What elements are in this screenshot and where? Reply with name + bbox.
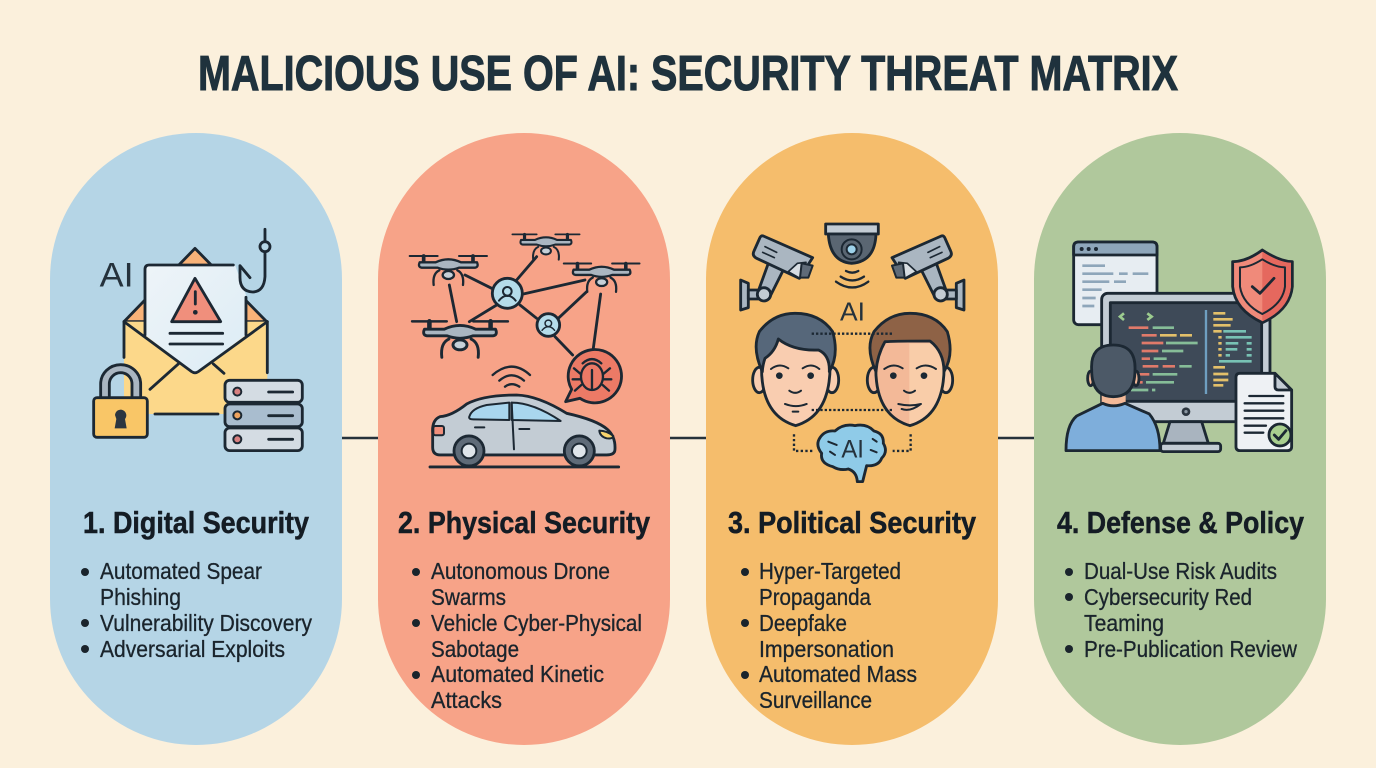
list: digital security threats: Vulnerability Discovery — [100, 610, 312, 636]
list: physical security threats: Automated Kinetic — [431, 661, 604, 687]
list: physical security threats — [412, 558, 642, 713]
list: defense and policy measures: Teaming — [1084, 610, 1164, 636]
list: digital security threats — [81, 558, 312, 662]
list: physical security threats: Sabotage — [431, 636, 519, 662]
list: digital security threats: Automated Spear — [100, 558, 262, 584]
list: political security threats — [741, 558, 917, 713]
panel: political security — [706, 133, 998, 745]
list: defense and policy measures — [1065, 558, 1297, 662]
list: digital security threats: Adversarial Exploits — [100, 636, 285, 662]
list: political security threats: Impersonation — [759, 636, 894, 662]
heading: defense and policy: 4. Defense & Policy — [1057, 506, 1304, 540]
list: physical security threats: Autonomous Drone — [431, 558, 610, 584]
panel: digital security — [50, 133, 342, 745]
list: defense and policy measures: Cybersecurity Red — [1084, 584, 1252, 610]
heading: digital security: 1. Digital Security — [83, 506, 309, 540]
list: political security threats: Propaganda — [759, 584, 871, 610]
list: defense and policy measures: Dual-Use Risk Audits — [1084, 558, 1277, 584]
icon: phishing email, lock and server: AI — [100, 257, 134, 295]
icon: surveillance cameras, deepfake faces and AI brain: AI — [841, 436, 864, 464]
panel: defense and policy — [1034, 133, 1326, 745]
list: political security threats: Surveillance — [759, 687, 872, 713]
list: physical security threats: Attacks — [431, 687, 502, 713]
icon: surveillance cameras, deepfake faces and AI brain — [741, 224, 964, 482]
list: physical security threats: Swarms — [431, 584, 506, 610]
list: digital security threats: Phishing — [100, 584, 181, 610]
list: political security threats: Automated Mass — [759, 661, 917, 687]
icon: developer at monitor with shield and audit document — [1066, 242, 1292, 452]
connector lines between panels — [342, 437, 1034, 439]
list: political security threats: Hyper-Targeted — [759, 558, 901, 584]
icon: phishing email, lock and server — [94, 229, 302, 451]
list: political security threats: Deepfake — [759, 610, 847, 636]
list: physical security threats: Vehicle Cyber-Physical — [431, 610, 642, 636]
list: defense and policy measures: Pre-Publication Review — [1084, 636, 1297, 662]
heading: physical security: 2. Physical Security — [398, 506, 650, 540]
panel: physical security — [378, 133, 670, 745]
icon: surveillance cameras, deepfake faces and AI brain: AI — [840, 296, 865, 326]
heading: political security: 3. Political Security — [728, 506, 976, 540]
icon: drone swarm, malware and connected car — [410, 234, 640, 467]
